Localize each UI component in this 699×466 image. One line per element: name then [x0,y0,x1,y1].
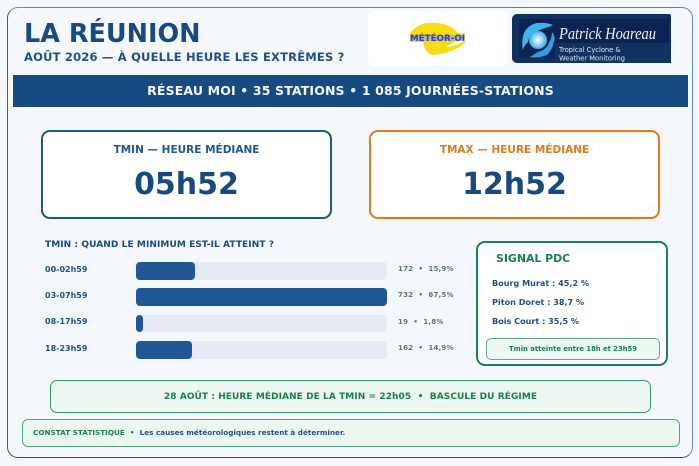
value 03-07h59: 732 • 67,5% [398,291,454,299]
callout: constat statistique [22,419,680,447]
logo: Météor-OI [368,11,508,66]
signal heading: SIGNAL PDC [496,252,570,265]
label: Tmin: TMIN — HEURE MÉDIANE [114,144,259,156]
signal Bourg Murat: Bourg Murat : 45,2 % [492,278,589,288]
callout: 28 août: 28 AOÛT : HEURE MÉDIANE DE LA TMIN = 22h05 • BASCULE DU RÉGIME [164,392,537,402]
bar 03-07h59 [136,288,387,306]
chart heading: TMIN : QUAND LE MINIMUM EST-IL ATTEINT ? [45,240,274,250]
value 18-23h59: 162 • 14,9% [398,344,454,352]
bar chart [45,262,454,359]
bar label 00-02h59: 00-02h59 [45,264,87,274]
bar 18-23h59 [136,341,387,358]
value 08-17h59: 19 • 1,8% [398,318,444,326]
bar label 03-07h59: 03-07h59 [45,291,87,300]
bar 08-17h59 [136,314,387,332]
value 00-02h59: 172 • 15,9% [398,264,454,272]
panel: signal PDC [476,241,668,366]
network banner: RÉSEAU MOI • 35 STATIONS • 1 085 JOURNÉES-STATIONS [147,83,554,98]
signal Bois Court: Bois Court : 35,5 % [492,316,579,326]
subtitle: AOÛT 2026 — À QUELLE HEURE LES EXTRÊMES ? [24,50,345,64]
signal note [486,338,660,360]
logo: Patrick Hoareau: Patrick Hoareau [558,24,656,43]
signal Piton Doret: Piton Doret : 38,7 % [492,297,584,307]
value: Tmin: 05h52 [134,167,239,202]
callout: constat statistique: CONSTAT STATISTIQUE • Les causes météorologiques restent à déterminer. [33,428,345,437]
signal note: Tmin atteinte entre 18h et 23h59 [509,345,637,353]
bar label 18-23h59: 18-23h59 [45,344,87,353]
logo: Patrick Hoareau: Tropical Cyclone & [558,46,621,54]
callout: 28 août [50,380,651,413]
logo: Patrick Hoareau [512,14,671,63]
value: Tmax: 12h52 [462,167,567,202]
card: Tmin [41,130,332,219]
title: LA RÉUNION [24,19,200,49]
card: Tmax [369,130,660,219]
label: Tmax: TMAX — HEURE MÉDIANE [440,144,589,156]
bar label 08-17h59: 08-17h59 [45,317,87,326]
logo: Patrick Hoareau: Weather Monitoring [559,54,625,62]
bar 00-02h59 [136,262,387,280]
logo: Météor-OI: MÉTÉOR-OI [410,32,465,44]
network banner [13,75,688,107]
